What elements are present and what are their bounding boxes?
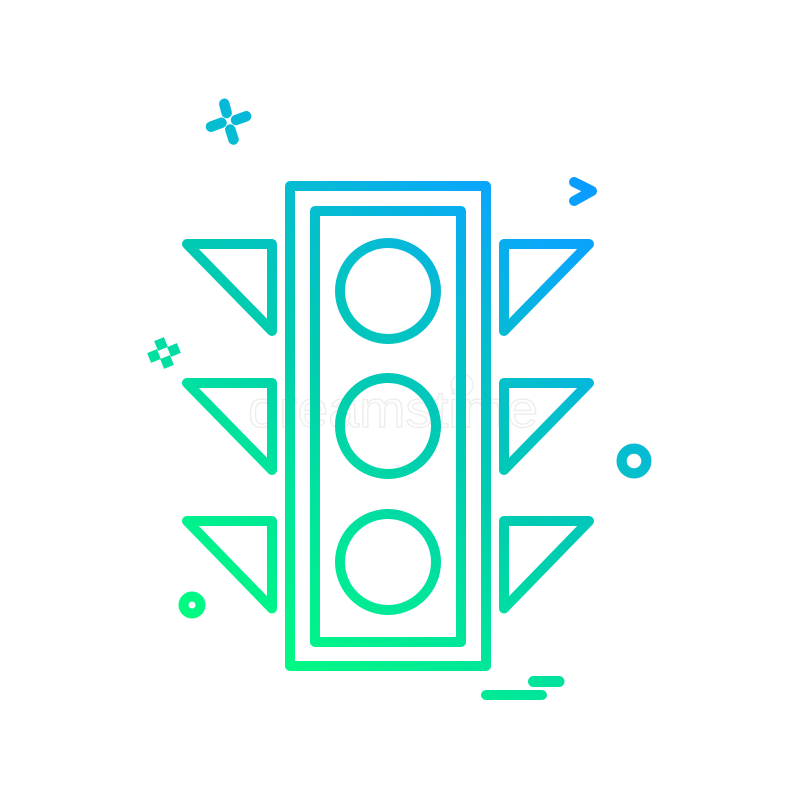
right visor triangles [504,244,589,608]
middle left triangle [187,383,272,470]
icon: right ring [622,449,646,473]
traffic light housing [290,186,486,666]
top right triangle [504,244,589,331]
inner frame [315,211,461,642]
bottom lamp [340,514,436,610]
middle lamp [340,378,436,474]
speed dashes [486,682,559,695]
middle right triangle [504,383,589,470]
icon: checker diamond [147,337,181,369]
signal lamps [340,243,436,610]
icon: chevron arrow [574,182,592,201]
left visor triangles [187,244,272,608]
watermark: dreamstime [248,381,538,439]
bottom left triangle [187,521,272,608]
icon: four-petal sparkle [211,104,246,140]
bottom right triangle [504,521,589,608]
icon: left small ring [184,596,200,614]
outer frame [290,186,486,666]
top left triangle [187,244,272,331]
top lamp [340,243,436,339]
